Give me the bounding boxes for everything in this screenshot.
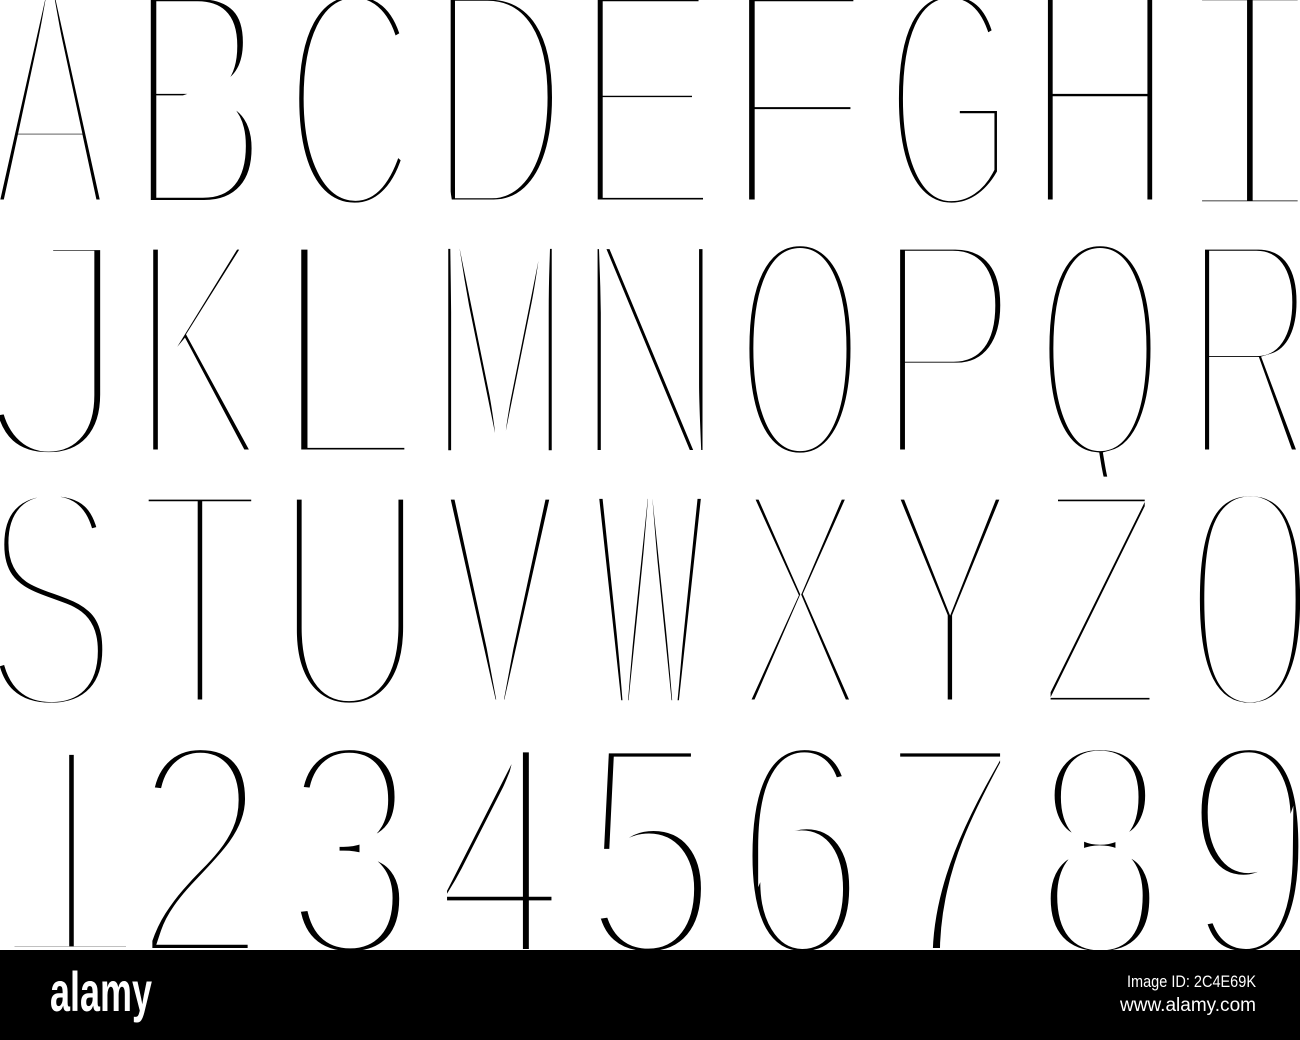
website: www.alamy.com <box>1119 995 1256 1016</box>
row: digits 1 to 9: 6 <box>732 677 868 1025</box>
row: letters S to Z and zero: U <box>273 419 427 781</box>
row: digits 1 to 9: 2 <box>132 677 268 1025</box>
row: letters J to R: L <box>269 168 423 531</box>
row: letters S to Z and zero: Y <box>883 419 1017 781</box>
row: digits 1 to 9: 4 <box>435 676 565 1025</box>
row: letters J to R: Q <box>1036 169 1164 530</box>
row: digits 1 to 9: 5 <box>581 675 719 1024</box>
row: digits 1 to 9: 3 <box>282 677 418 1025</box>
row: letters A to I <box>0 0 1300 318</box>
row: letters J to R: M <box>428 167 572 530</box>
row: letters S to Z and zero: V <box>441 419 560 780</box>
row: digits 1 to 9 <box>0 675 1300 1025</box>
row: digits 1 to 9: 7 <box>879 677 1021 1025</box>
row: letters J to R: O <box>736 169 864 530</box>
logo: alamy: alamy <box>50 960 152 1023</box>
row: letters J to R: N <box>573 169 727 531</box>
footer bar <box>0 950 1300 1040</box>
row: letters J to R: K <box>129 168 267 530</box>
row: letters S to Z and zero: Z <box>1037 418 1163 780</box>
row: letters J to R <box>0 167 1300 531</box>
row: letters S to Z and zero: W <box>593 418 707 780</box>
row: letters J to R: P <box>875 168 1019 530</box>
image ID: Image ID: 2C4E69K <box>1127 972 1257 991</box>
row: letters S to Z and zero: X <box>733 419 867 781</box>
row: digits 1 to 9: 8 <box>1032 677 1168 1025</box>
row: letters S to Z and zero <box>0 418 1300 781</box>
row: letters S to Z and zero: T <box>137 418 263 780</box>
